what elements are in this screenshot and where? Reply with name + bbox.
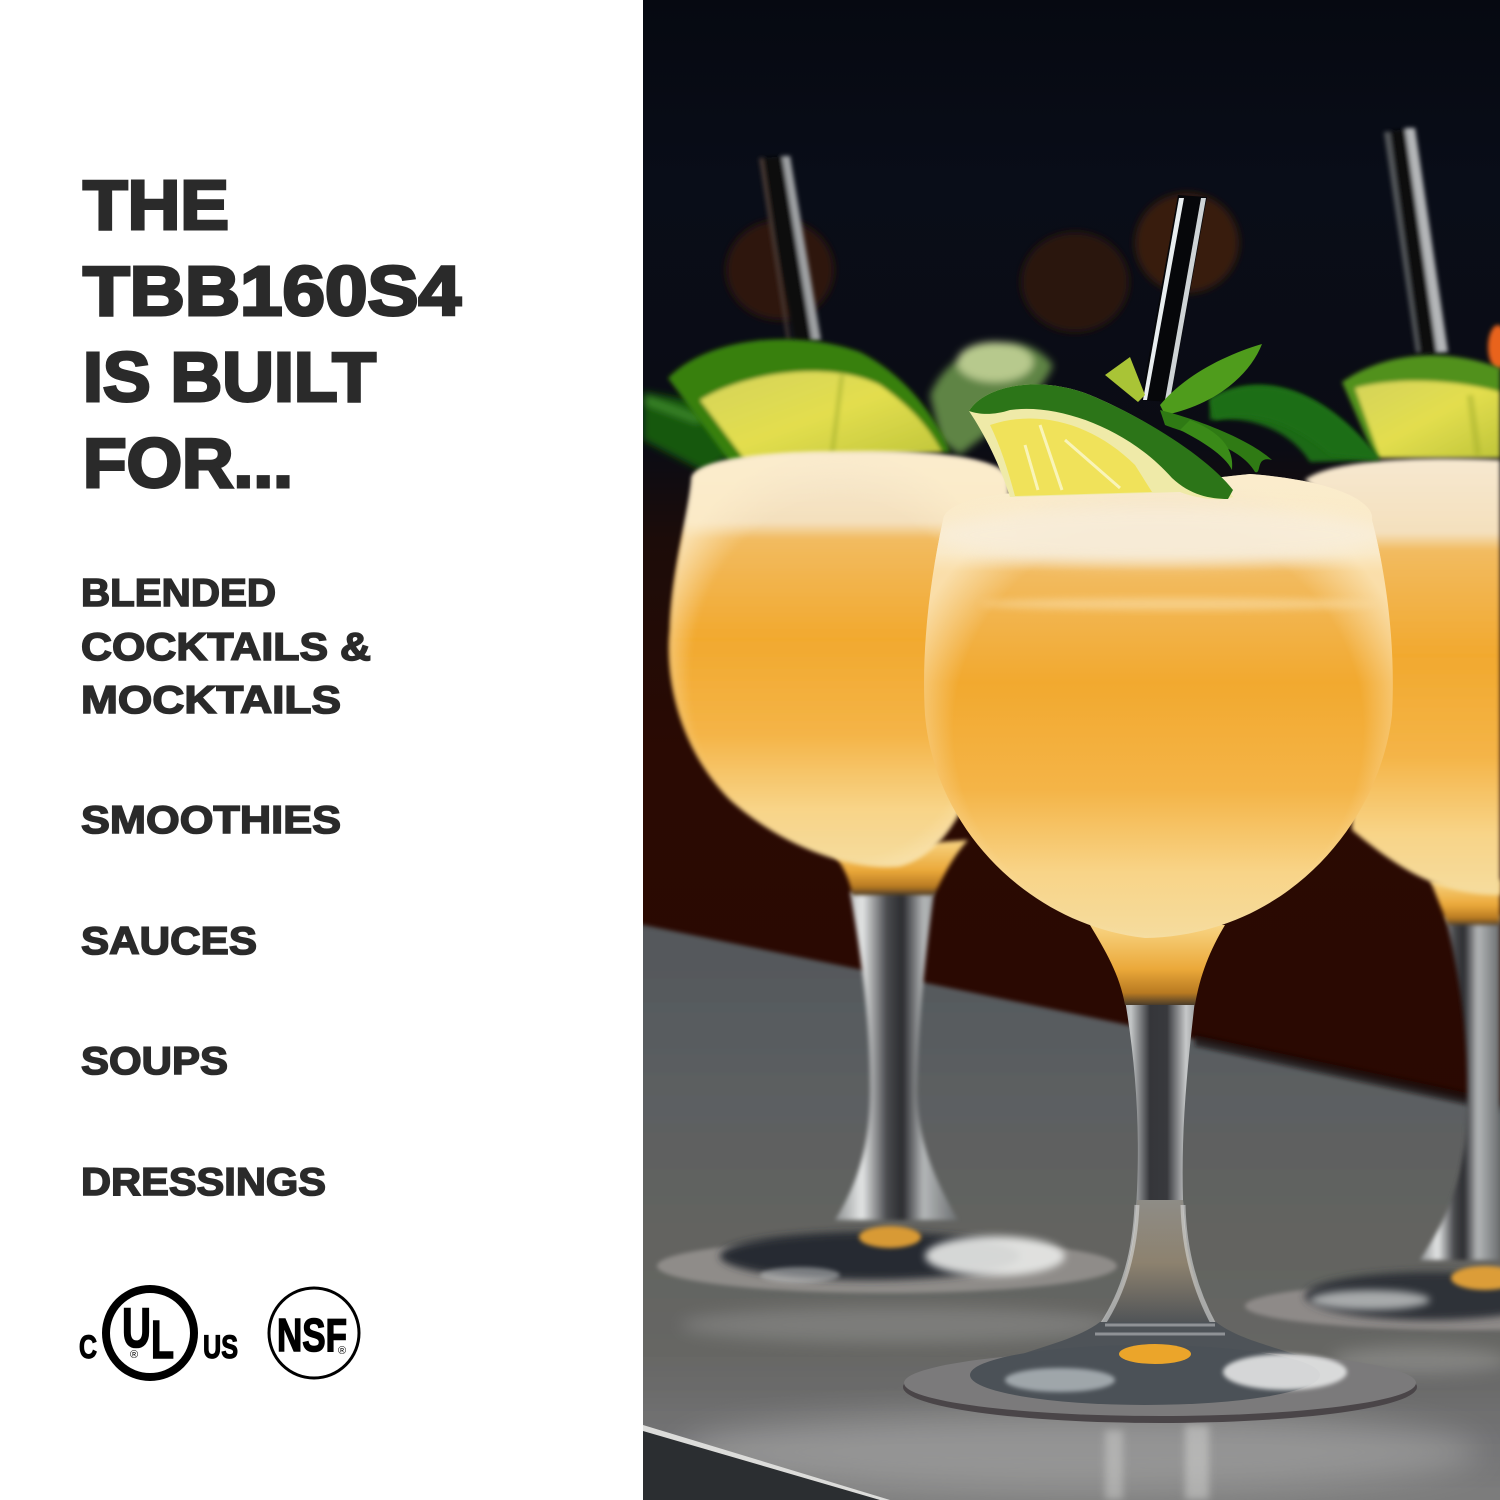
bowl — [1305, 459, 1500, 895]
backdrop — [643, 0, 1500, 1109]
garnish: orange cherry — [1488, 325, 1500, 369]
stem — [975, 1000, 1345, 1375]
icon: cULus certification mark: US — [203, 1329, 238, 1365]
icon: NSF certification mark — [269, 1288, 359, 1378]
icon: NSF certification mark: NSF — [277, 1309, 347, 1361]
straw — [1384, 128, 1448, 354]
use list — [81, 572, 371, 1204]
white text panel — [0, 0, 643, 1500]
icon: cULus certification mark: C — [79, 1329, 97, 1365]
item: blended cocktails and mocktails: MOCKTAILS — [81, 679, 341, 722]
garnish: mint leaves — [1210, 385, 1378, 462]
item: smoothies: SMOOTHIES — [81, 799, 341, 842]
garnish: tarragon sprig — [1105, 344, 1380, 472]
title: THE — [83, 166, 229, 244]
stem and base — [657, 840, 1117, 1293]
bowl — [924, 474, 1393, 938]
stem and base — [1245, 880, 1500, 1330]
garnish: lime wedge — [969, 384, 1233, 499]
icon: cULus certification mark: L — [151, 1310, 174, 1370]
item: soups: SOUPS — [81, 1040, 228, 1083]
garnish: mint leaves — [643, 342, 1053, 472]
neck — [1090, 925, 1225, 1005]
icon: cULus certification mark: ® — [130, 1349, 138, 1361]
photo: three frozen cocktails on a bar — [600, 0, 1500, 1500]
title: IS BUILT — [83, 338, 376, 416]
icon: cULus certification mark: U — [122, 1296, 151, 1359]
back-left cocktail — [643, 156, 1117, 1293]
item: blended cocktails and mocktails: COCKTAILS & — [81, 626, 371, 669]
item: sauces: SAUCES — [81, 920, 257, 963]
bowl — [669, 452, 1008, 867]
straw — [1141, 195, 1207, 402]
back-right cocktail — [1210, 128, 1500, 1330]
item: blended cocktails and mocktails: BLENDED — [81, 572, 276, 615]
base — [903, 1344, 1417, 1423]
title — [83, 166, 461, 502]
bar counter — [600, 916, 1500, 1500]
title: TBB160S4 — [83, 252, 461, 330]
icon: NSF certification mark: ® — [338, 1345, 346, 1357]
straw — [759, 156, 821, 342]
garnish: lime slice — [1342, 355, 1500, 458]
item: blended cocktails and mocktails — [81, 572, 371, 722]
item: dressings: DRESSINGS — [81, 1161, 326, 1204]
centre cocktail — [903, 195, 1417, 1423]
garnish: lime slice — [668, 339, 950, 462]
icon: cULus certification mark — [79, 1289, 238, 1377]
title: FOR... — [83, 424, 293, 502]
